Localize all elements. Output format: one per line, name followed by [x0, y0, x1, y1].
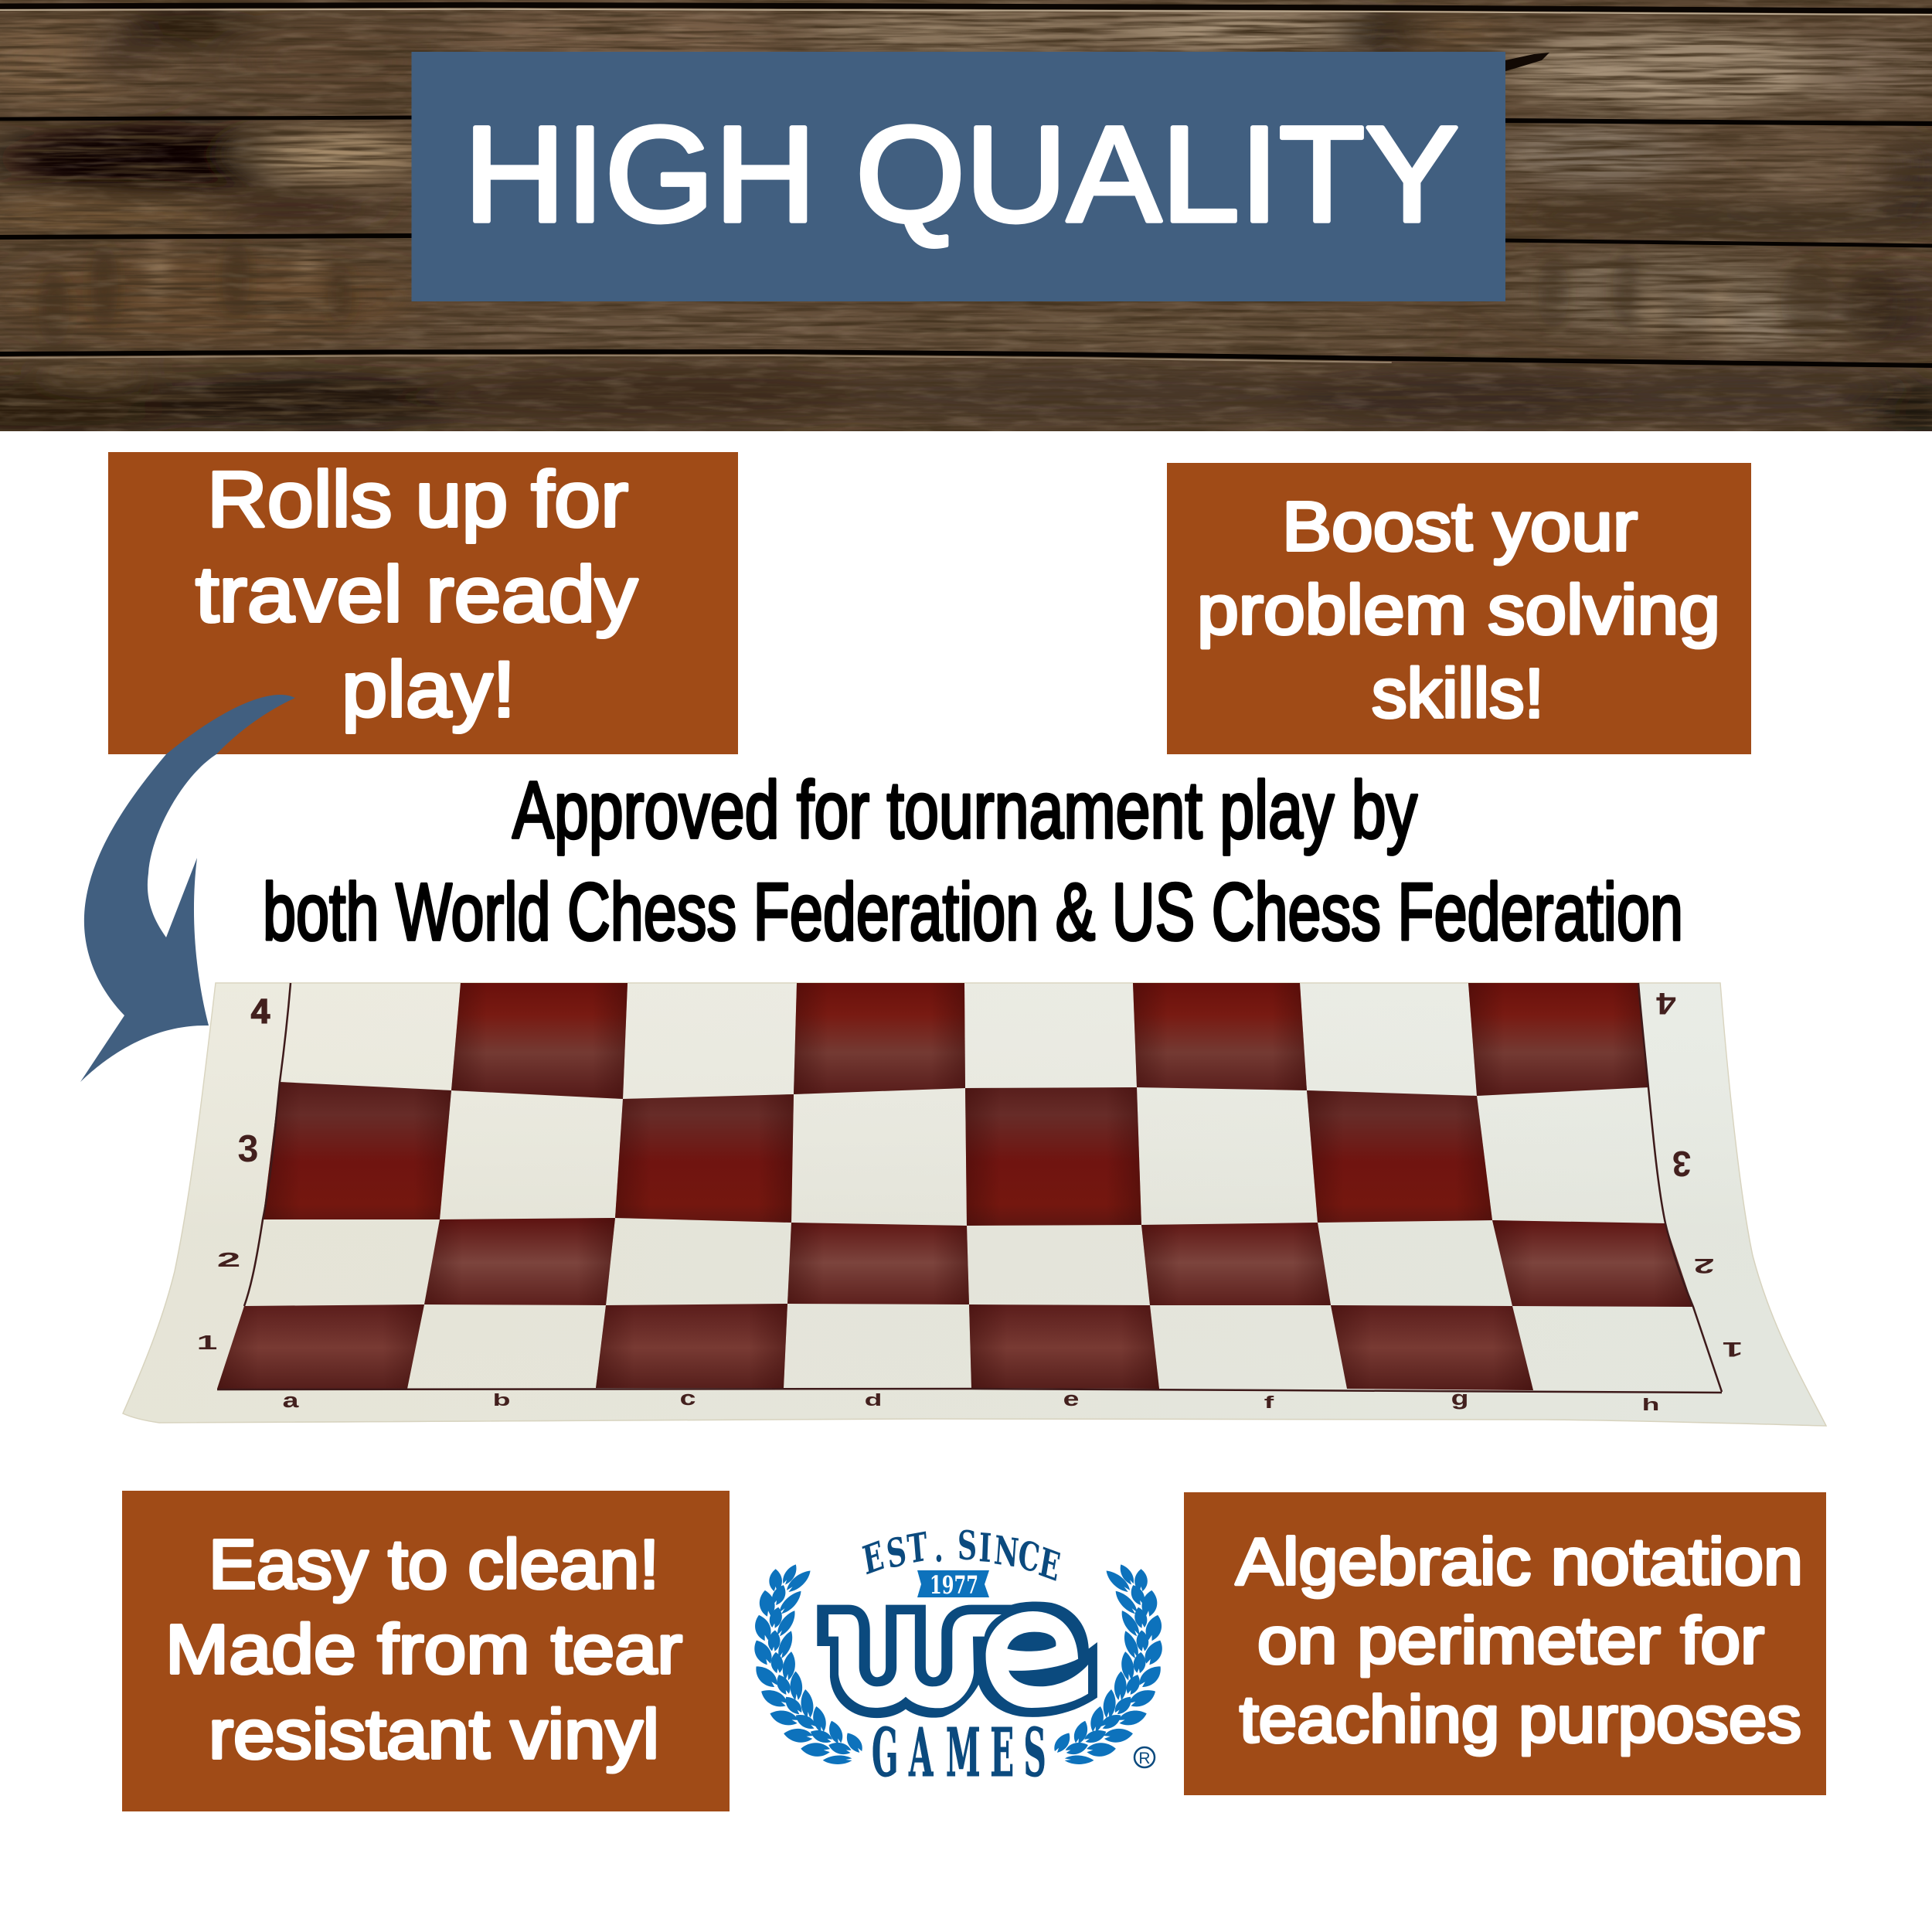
file labels: b: [493, 1390, 510, 1410]
logo: 1977 ribbon: 1977: [930, 1570, 978, 1600]
arrow: from callout to board: [80, 695, 295, 1082]
logo: GAMES: GAMES: [872, 1713, 1046, 1791]
callout: boost problem solving: skills!: [1372, 655, 1544, 733]
callout: rolls up for travel: play!: [342, 645, 515, 733]
dark squares: rank 3: [263, 1082, 1492, 1226]
title banner: HIGH QUALITY: HIGH QUALITY: [464, 99, 1459, 250]
callout: easy to clean: [122, 1491, 730, 1811]
callout: easy to clean: resistant vinyl: [209, 1696, 659, 1774]
rank labels right, upside down: [1656, 986, 1743, 1360]
file labels: a: [283, 1388, 299, 1412]
rank labels right, upside down: 2: [1694, 1254, 1714, 1277]
callout: boost problem solving: [1167, 463, 1751, 754]
callout: algebraic notation: on perimeter for: [1257, 1604, 1764, 1678]
title banner: HIGH QUALITY: [411, 52, 1505, 301]
rank labels right, upside down: 3: [1672, 1144, 1691, 1184]
callout: algebraic notation: Algebraic notation: [1236, 1526, 1803, 1599]
file labels: f: [1264, 1393, 1274, 1412]
file labels: c: [680, 1386, 696, 1410]
rank labels left: 2: [217, 1249, 240, 1271]
file labels: g: [1451, 1386, 1468, 1410]
file labels: [283, 1386, 1659, 1414]
rank labels right, upside down: 4: [1656, 986, 1676, 1020]
callout: boost problem solving: Boost your: [1282, 488, 1638, 566]
file labels: h: [1642, 1395, 1659, 1414]
callout: algebraic notation: [1184, 1492, 1826, 1795]
rank labels left: 1: [197, 1332, 217, 1354]
rank labels left: 3: [238, 1128, 258, 1170]
file labels: e: [1063, 1386, 1079, 1410]
file labels: d: [865, 1390, 882, 1410]
rank labels left: 4: [251, 993, 270, 1031]
chess board: rolled vinyl photo: [123, 983, 1826, 1426]
logo: registered mark: [1134, 1747, 1155, 1767]
callout: rolls up for travel: travel ready: [196, 550, 638, 638]
rank labels right, upside down: 1: [1723, 1338, 1743, 1360]
callout: rolls up for travel: Rolls up for: [207, 455, 628, 543]
board frame lines: [217, 983, 1722, 1393]
logo: WE Games: [750, 1523, 1167, 1791]
logo laurel wreath: [750, 1563, 1167, 1765]
heading: tournament approval: [263, 765, 1683, 957]
logo: EST. SINCE: EST. SINCE: [859, 1523, 1063, 1591]
heading: tournament approval: Approved for tournament play by: [512, 765, 1417, 855]
rank labels left: [197, 993, 270, 1354]
dark squares: rank 2: [424, 1218, 1693, 1307]
vinyl sheet: [123, 983, 1826, 1426]
banner: wood plank background: [0, 0, 1932, 440]
logo: registered mark: R: [1138, 1750, 1151, 1767]
callout: boost problem solving: problem solving: [1197, 572, 1720, 649]
logo: WE wordmark: [817, 1601, 1097, 1718]
callout: easy to clean: Easy to clean!: [209, 1526, 659, 1604]
dark squares: rank 1: [217, 1304, 1533, 1390]
square edge shading: [217, 983, 1693, 1390]
vertical mottling on third plank: [39, 240, 1898, 348]
callout: algebraic notation: teaching purposes: [1240, 1683, 1801, 1757]
callout: rolls up for travel: [108, 452, 738, 754]
callout: easy to clean: Made from tear: [165, 1611, 682, 1689]
dark squares: rank 4: [451, 983, 1648, 1099]
